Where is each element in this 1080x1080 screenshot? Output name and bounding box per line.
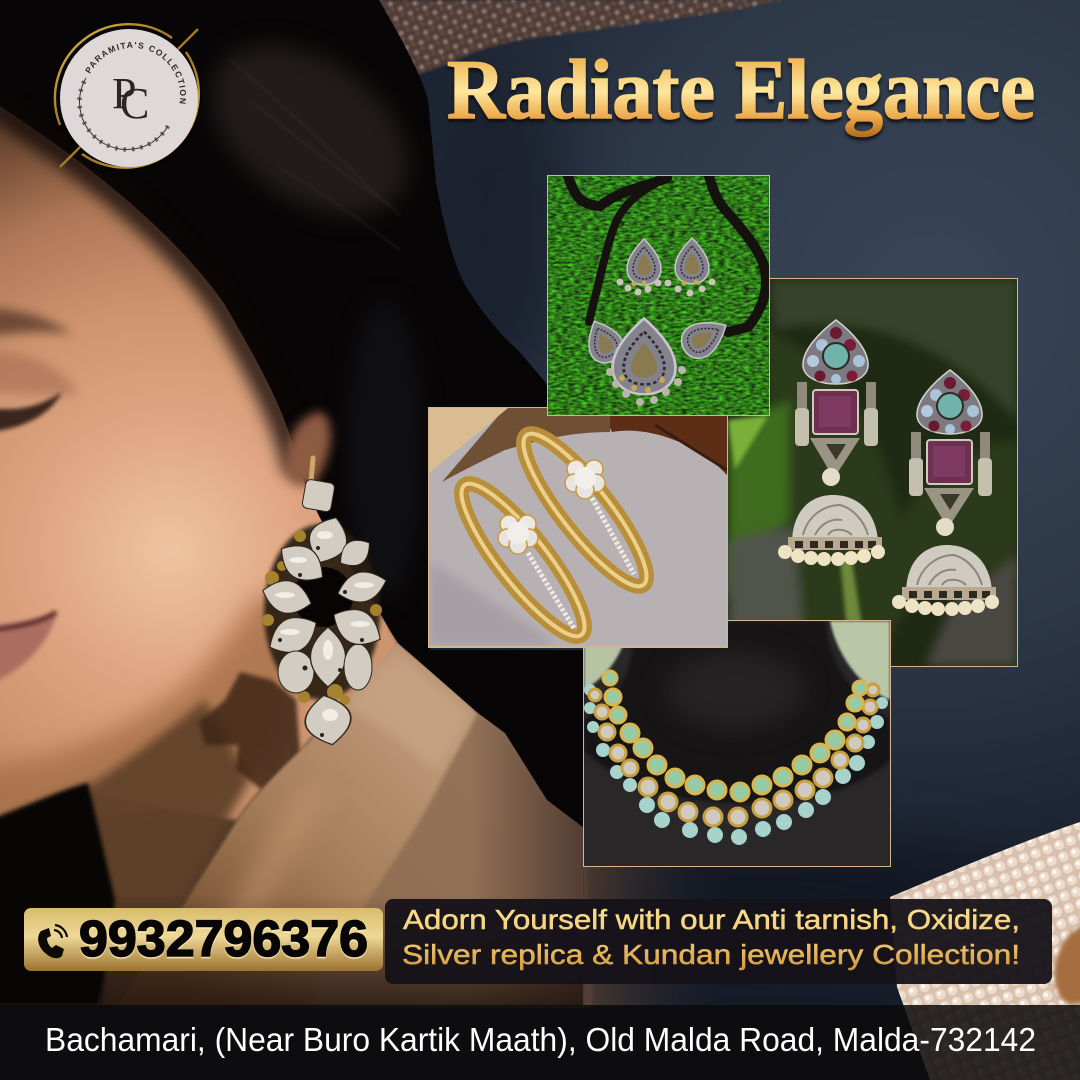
scarf: [115, 643, 592, 1006]
hair sheen: [180, 10, 440, 250]
info panel: [385, 899, 1052, 984]
phone pill: [24, 908, 383, 971]
logo disc: [60, 29, 198, 167]
icon: phone: [38, 925, 67, 958]
pendant: [588, 320, 622, 364]
bangle left: [454, 476, 592, 644]
tagline: [402, 904, 1020, 970]
photo card: jhumka earrings on leaf: [727, 278, 1018, 667]
hairline softness: [0, 104, 298, 472]
logo gold ring: [56, 25, 202, 171]
earrings set: [627, 239, 661, 285]
eye and brow: [0, 308, 72, 336]
tagline: Silver replica & Kundan jewellery Collection!: [402, 939, 1020, 970]
title: Elegance: [735, 43, 1035, 137]
necklace kundan row: [589, 684, 879, 826]
neck base: [0, 680, 310, 1006]
ear: [285, 412, 331, 487]
phone number: 9932796376: [79, 910, 368, 967]
photo card: gold bangles: [428, 407, 728, 650]
address bar: Bachamari, (Near Buro Kartik Maath), Old Malda Road, Malda-732142: [45, 1021, 1036, 1058]
logo wordmark: [90, 48, 180, 117]
title: [447, 43, 1035, 137]
address bar: [0, 1005, 1080, 1080]
logo: [54, 23, 200, 169]
logo monogram: P: [112, 69, 136, 118]
photo card: kundan necklace: [583, 620, 891, 867]
crystal earring: [259, 458, 390, 749]
bangle right: [516, 426, 654, 594]
logo: PARAMITA'S COLLECTION: [85, 42, 186, 104]
logo wreath: [79, 78, 168, 150]
jaw shading: [0, 590, 310, 825]
logo: C: [120, 79, 149, 128]
pearls: [890, 822, 1080, 1080]
necklace beads: [584, 684, 888, 845]
dark lower-left: [0, 783, 115, 1006]
sequin fabric: [379, 0, 785, 80]
title: Radiate: [447, 43, 715, 137]
tagline: Adorn Yourself with our Anti tarnish, Oxidize,: [403, 904, 1020, 935]
face and neck: [0, 80, 400, 825]
necklace green stones: [603, 671, 867, 801]
cord: [568, 176, 766, 332]
woman photo: [0, 0, 733, 1006]
lips: [0, 612, 57, 684]
photo card: oxidised necklace set on grass: [547, 175, 770, 416]
hair: [0, 0, 584, 828]
neck dapple shadow: [199, 672, 300, 790]
